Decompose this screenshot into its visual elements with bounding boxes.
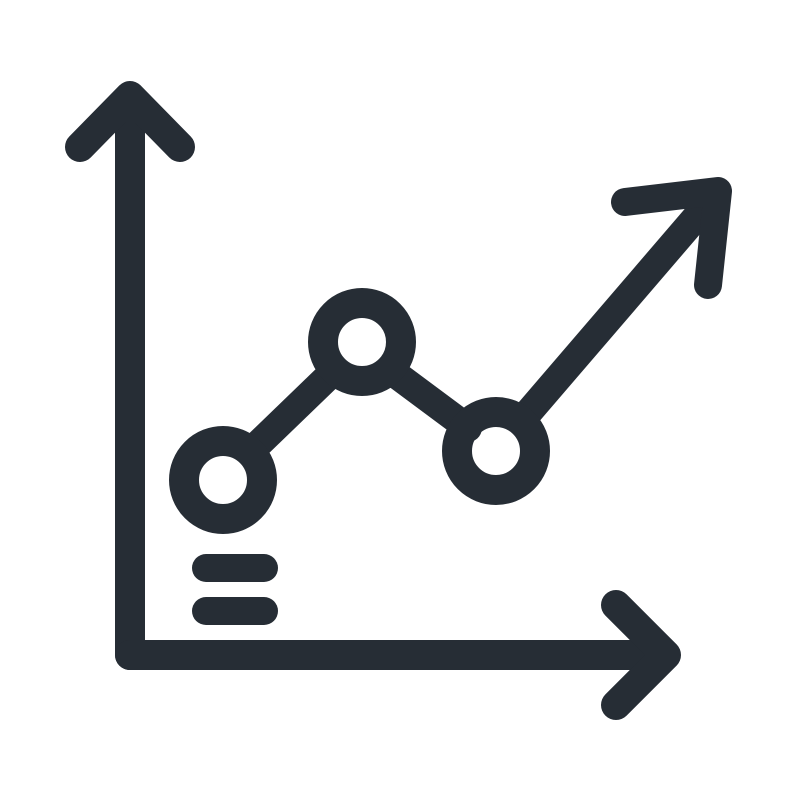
- axes: [80, 96, 666, 705]
- trend arrowhead: [625, 191, 718, 285]
- data points: [184, 303, 535, 519]
- horizontal axis with arrow: [130, 605, 666, 705]
- trend line: [250, 191, 718, 452]
- legend bars: [192, 554, 278, 625]
- vertical axis with arrow: [80, 96, 180, 655]
